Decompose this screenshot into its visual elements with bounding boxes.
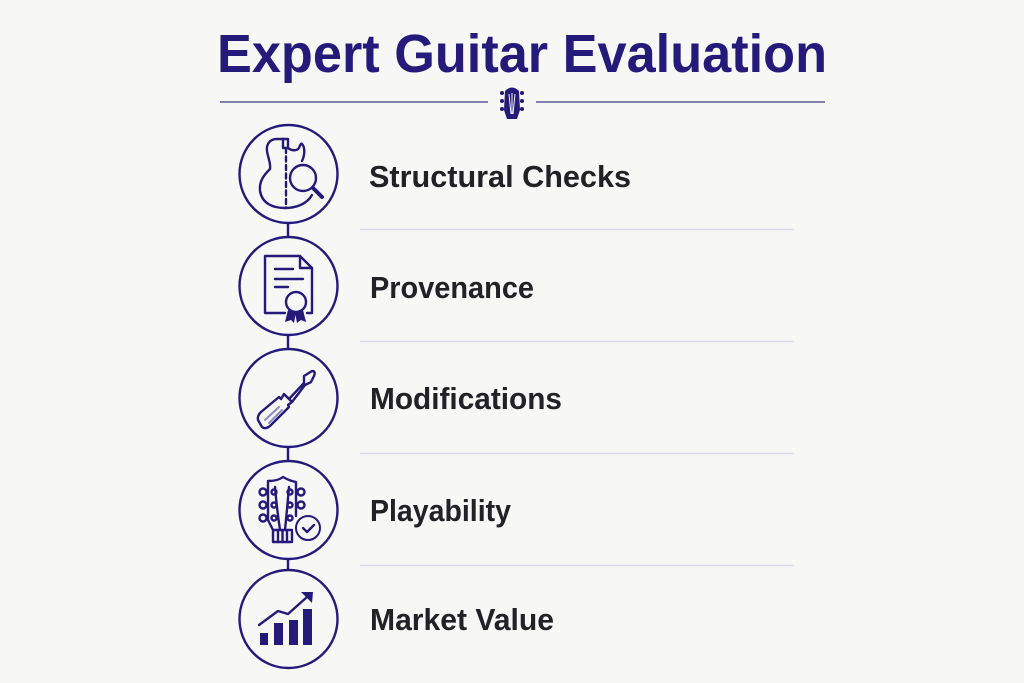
icon: rising bar chart with arrow <box>240 570 338 668</box>
divider 2 <box>360 340 794 342</box>
label: modifications: Modifications <box>370 381 562 416</box>
title: Expert Guitar Evaluation <box>217 24 827 84</box>
step 3: modifications <box>240 349 562 447</box>
icon: guitar body with magnifier <box>240 125 338 223</box>
icon: screwdriver <box>240 349 338 447</box>
icon: guitar headstock with check mark <box>240 461 338 559</box>
divider 3 <box>360 452 794 454</box>
vertical connector line <box>287 222 289 571</box>
step 1: structural checks <box>240 125 631 223</box>
divider 1 <box>360 228 794 230</box>
label: playability: Playability <box>370 493 512 528</box>
label: provenance: Provenance <box>370 270 534 305</box>
label: structural checks: Structural Checks <box>369 159 631 194</box>
step 2: provenance <box>240 237 534 335</box>
title divider with guitar headstock icon <box>220 88 825 119</box>
step 4: playability <box>240 461 512 559</box>
step 5: market value <box>240 570 554 668</box>
icon: certificate document with ribbon <box>240 237 338 335</box>
label: market value: Market Value <box>370 602 554 637</box>
divider 4 <box>360 564 794 566</box>
